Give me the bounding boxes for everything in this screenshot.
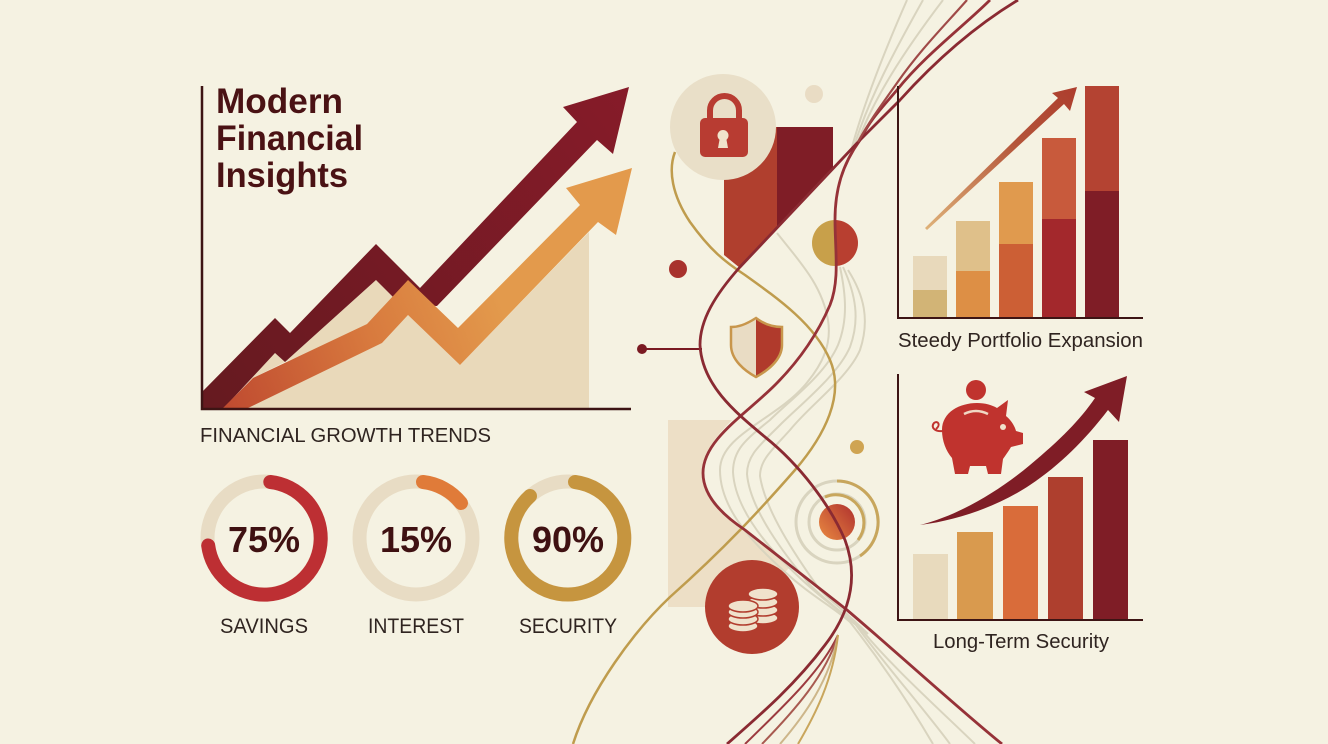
panel: steady portfolio expansion chart <box>898 86 1143 352</box>
chart caption: Steedy Portfolio Expansion <box>898 330 1143 352</box>
chart caption: FINANCIAL GROWTH TRENDS <box>200 425 491 447</box>
panel: savings donut: 75% <box>228 519 300 560</box>
title <box>216 82 363 195</box>
area under growth line <box>233 232 589 409</box>
beige block <box>668 420 790 607</box>
panel: security donut <box>511 482 624 638</box>
chart axes <box>202 86 631 409</box>
chart caption: Long-Term Security <box>933 631 1109 653</box>
chart axes <box>898 86 1143 318</box>
stacked bars <box>913 86 1119 318</box>
panel: security donut: 90% <box>532 519 604 560</box>
panel: central decorative shapes <box>573 0 1018 744</box>
thin flowing lines <box>720 0 975 744</box>
target rings <box>796 481 878 563</box>
chart axes <box>898 374 1143 620</box>
arrow: rising trend <box>925 87 1077 230</box>
lock circle icon <box>670 74 776 180</box>
panel: savings donut: SAVINGS <box>220 615 308 638</box>
title: Modern <box>216 82 343 121</box>
arrow: dark red growth line <box>202 87 629 409</box>
panel: interest donut: INTEREST <box>368 615 464 638</box>
panel: security donut: SECURITY <box>519 615 617 638</box>
title: Insights <box>216 156 348 195</box>
shield icon <box>731 318 782 377</box>
split circle <box>812 220 858 266</box>
red and maroon bars <box>724 127 833 268</box>
arrow: curved growth <box>920 376 1127 525</box>
panel: long-term security chart <box>898 374 1143 653</box>
panel: financial growth chart <box>200 82 632 447</box>
gold flowing curve <box>573 152 835 744</box>
arrow: orange growth line <box>223 168 632 408</box>
red flowing curve <box>703 0 1002 744</box>
title: Financial <box>216 119 363 158</box>
extra red strand into bundle <box>858 0 967 142</box>
small red dot <box>669 260 687 278</box>
dark red flowing curve <box>700 0 1018 744</box>
connector line with dot <box>637 344 702 354</box>
icon: piggy bank <box>933 380 1023 474</box>
panel: interest donut <box>360 482 472 638</box>
bottom fan of strands <box>745 635 838 744</box>
bars <box>913 440 1128 619</box>
small gold dot <box>850 440 864 454</box>
coin circle icon <box>705 560 799 654</box>
panel: interest donut: 15% <box>380 519 452 560</box>
small beige dot <box>805 85 823 103</box>
panel: savings donut <box>208 482 321 638</box>
